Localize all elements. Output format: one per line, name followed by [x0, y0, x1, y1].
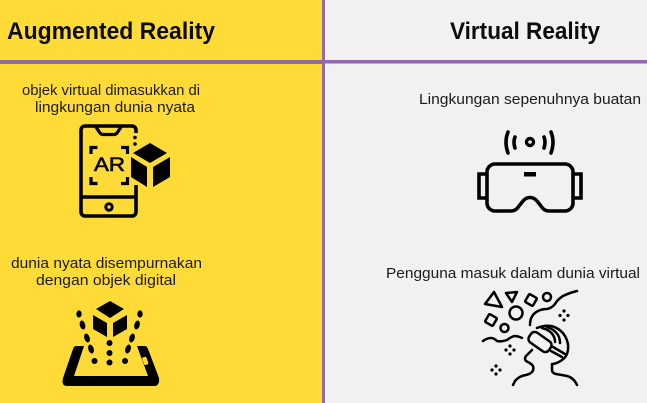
panel: augmented reality	[0, 0, 323, 403]
icon: person wearing VR headset with floating shapes	[483, 291, 577, 385]
panel: virtual reality	[323, 0, 647, 403]
heading: augmented reality: Augmented Reality	[7, 18, 216, 45]
icon: sparkle dots	[490, 309, 570, 376]
text: real world enhanced with digital objects: dengan objek digital	[36, 272, 176, 289]
text: virtual objects in the real world	[22, 82, 200, 116]
text: fully artificial environment: Lingkungan sepenuhnya buatan	[419, 91, 641, 108]
text: user enters a virtual world: Pengguna masuk dalam dunia virtual	[386, 265, 640, 282]
icon: AR phone with cube: AR	[94, 155, 125, 176]
text: real world enhanced with digital objects	[11, 255, 202, 289]
icon: AR phone with cube	[81, 126, 170, 216]
icon: hologram cube over tablet	[62, 301, 159, 386]
text: real world enhanced with digital objects: dunia nyata disempurnakan	[11, 255, 202, 272]
text: virtual objects in the real world: lingkungan dunia nyata	[35, 99, 196, 116]
icon: VR headset	[479, 132, 581, 211]
heading: virtual reality: Virtual Reality	[450, 18, 601, 45]
text: virtual objects in the real world: objek virtual dimasukkan di	[22, 82, 200, 99]
